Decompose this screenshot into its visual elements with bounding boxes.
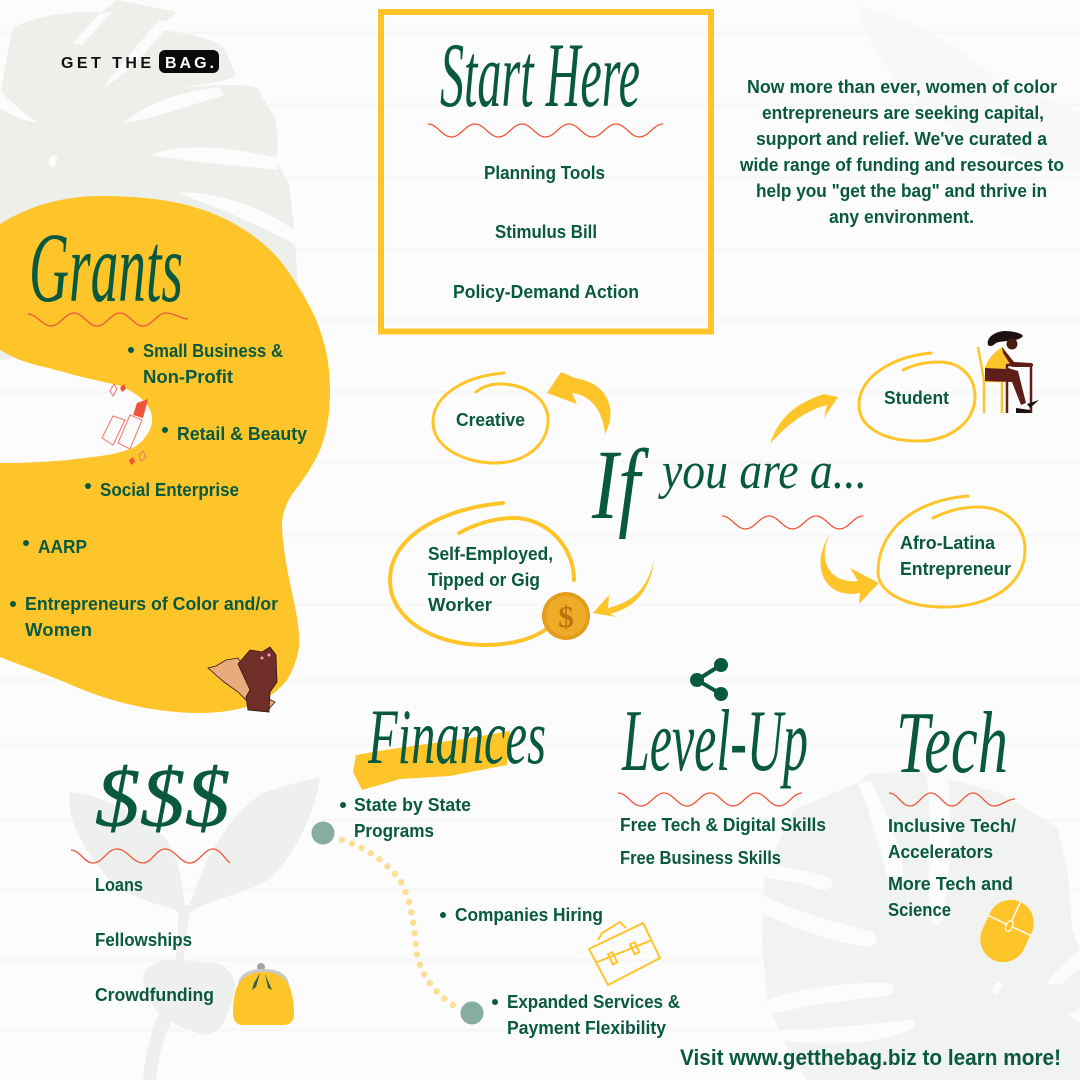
- text block: introduction: support and relief. We've curated a: [756, 128, 1048, 149]
- heading: Grants: Grants: [29, 212, 183, 323]
- wavy underline: grants: [28, 313, 188, 326]
- dotted connector: finances timeline: [312, 822, 484, 1024]
- list: level-up items: Free Business Skills: [620, 847, 781, 868]
- wavy underline: if you are a: [722, 516, 863, 529]
- callout: self-employed: [390, 503, 574, 645]
- heading: If you are a...: you are a...: [658, 443, 867, 500]
- callout: afro-latina: Afro-Latina: [900, 532, 996, 553]
- arrow: to creative: [547, 372, 611, 434]
- icon: computer mouse: [973, 892, 1041, 970]
- background leaf: top right faint leaf: [858, 7, 1080, 170]
- list: tech items: Science: [888, 899, 951, 920]
- heading: Finances: Finances: [367, 693, 546, 780]
- list: grants items: [10, 340, 308, 640]
- text block: introduction: wide range of funding and resources to: [739, 154, 1064, 175]
- heading: $$$: $$$: [95, 752, 230, 845]
- icon: student at desk: [978, 331, 1039, 413]
- callout: self-employed: Worker: [428, 594, 492, 615]
- wavy underline: start here: [428, 124, 663, 137]
- list: money items: [95, 874, 214, 1005]
- list: level-up items: [620, 814, 826, 868]
- icon: briefcase: [589, 922, 660, 985]
- list: finances items: [340, 794, 680, 1038]
- list: start here items: Policy-Demand Action: [453, 281, 639, 302]
- icon: joined hands: [208, 647, 277, 712]
- arrow: to student: [770, 392, 838, 444]
- list: finances items: State by State: [354, 794, 471, 815]
- icon: gold coin: [542, 592, 590, 640]
- text block: introduction: help you "get the bag" and thrive in: [756, 180, 1047, 201]
- wavy underline: money: [71, 849, 230, 863]
- list: tech items: More Tech and: [888, 873, 1013, 894]
- icon: share: [690, 658, 728, 701]
- callout: creative: [433, 373, 548, 463]
- background leaf: top left monstera: [0, 0, 300, 360]
- callout: student: [859, 353, 975, 441]
- callout: afro-latina: [878, 496, 1025, 607]
- heading: If you are a...: [591, 429, 867, 540]
- list: grants items: Entrepreneurs of Color and/or: [25, 593, 278, 614]
- text block: introduction: [739, 76, 1064, 227]
- panel: start here: [381, 12, 711, 332]
- arrow: to afro-latina: [820, 533, 879, 604]
- heading: Level-Up: Level-Up: [621, 693, 808, 790]
- wavy underline: tech: [889, 793, 1015, 806]
- list: tech items: Accelerators: [888, 841, 993, 862]
- arrow: to self-employed: [593, 560, 654, 617]
- callout: student: Student: [884, 387, 949, 408]
- text block: introduction: entrepreneurs are seeking capital,: [762, 102, 1044, 123]
- list: money items: Loans: [95, 874, 143, 895]
- brush stroke behind finances: [353, 731, 510, 790]
- list: finances items: Payment Flexibility: [507, 1017, 667, 1038]
- list: level-up items: Free Tech & Digital Skills: [620, 814, 826, 835]
- list: grants items: Retail & Beauty: [177, 423, 308, 444]
- list: finances items: Companies Hiring: [455, 904, 603, 925]
- list: grants items: Small Business &: [143, 340, 283, 361]
- background leaf: bottom right monstera: [762, 770, 1080, 1080]
- list: money items: Crowdfunding: [95, 984, 214, 1005]
- wavy underline: level-up: [618, 793, 802, 806]
- footer: call to action: Visit www.getthebag.biz to learn more!: [680, 1045, 1061, 1070]
- logo: Get The Bag: BAG.: [165, 55, 214, 72]
- heading: Tech: Tech: [896, 695, 1008, 792]
- background leaf: bottom left plant: [69, 777, 320, 1080]
- list: finances items: Programs: [354, 820, 434, 841]
- list: start here items: Planning Tools: [484, 162, 605, 183]
- list: grants items: Women: [25, 619, 92, 640]
- list: start here items: Stimulus Bill: [495, 221, 597, 242]
- list: grants items: Social Enterprise: [100, 479, 239, 500]
- list: tech items: [888, 815, 1016, 920]
- icon: purse: [233, 963, 294, 1025]
- list: grants items: Non-Profit: [143, 366, 233, 387]
- icon: gold coin: $: [558, 599, 574, 634]
- list: grants items: AARP: [38, 536, 87, 557]
- callout: creative: Creative: [456, 409, 525, 430]
- callout: self-employed: Self-Employed,: [428, 543, 553, 564]
- logo: Get The Bag: [61, 50, 219, 73]
- text block: introduction: Now more than ever, women of color: [747, 76, 1057, 97]
- callout: self-employed: Tipped or Gig: [428, 569, 540, 590]
- list: start here items: [453, 162, 639, 302]
- heading: Start Here: Start Here: [440, 24, 640, 126]
- logo: Get The Bag: GET THE: [61, 55, 151, 72]
- callout: afro-latina: Entrepreneur: [900, 558, 1011, 579]
- panel: grants yellow blob: [0, 196, 330, 713]
- list: money items: Fellowships: [95, 929, 192, 950]
- icon: lipstick: [102, 384, 148, 465]
- heading: If you are a...: If: [591, 429, 650, 540]
- list: finances items: Expanded Services &: [507, 991, 680, 1012]
- text block: introduction: any environment.: [829, 206, 974, 227]
- list: tech items: Inclusive Tech/: [888, 815, 1016, 836]
